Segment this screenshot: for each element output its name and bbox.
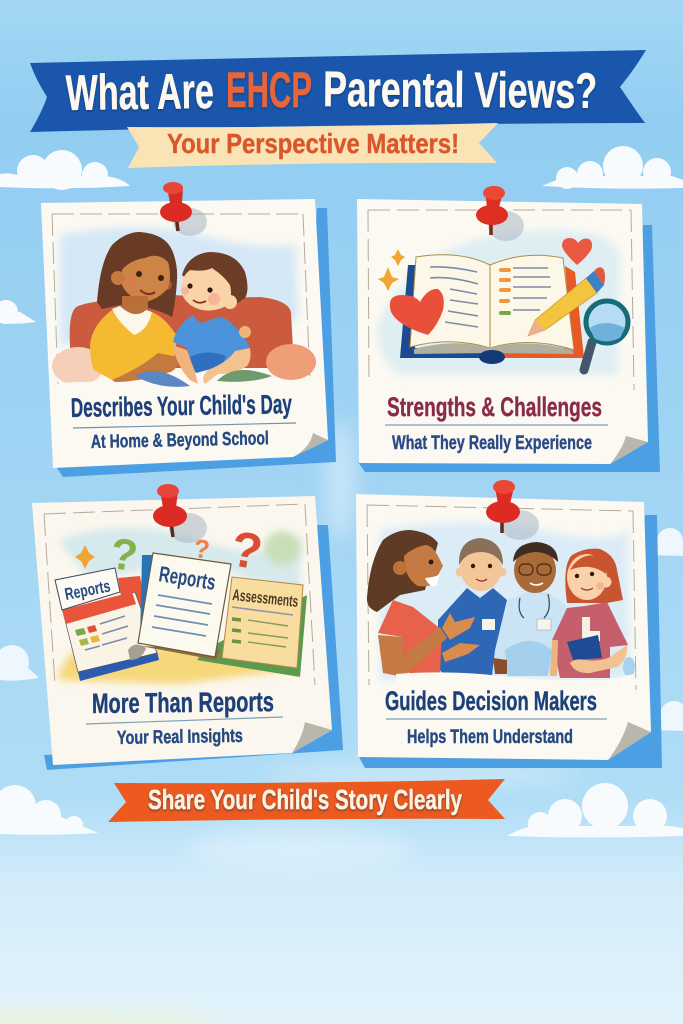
subtitle text: Your Perspective Matters! xyxy=(167,128,459,159)
page curl xyxy=(292,722,332,753)
heart small xyxy=(562,238,592,265)
paper shadow xyxy=(358,225,660,472)
card heading: Strengths & Challenges xyxy=(387,392,602,422)
professional in blue shirt xyxy=(438,538,507,676)
panel: more than reports xyxy=(32,496,343,770)
panel: strengths and challenges xyxy=(357,199,660,472)
professional with red hair xyxy=(550,549,635,678)
card heading: More Than Reports xyxy=(92,686,274,719)
card subheading: What They Really Experience xyxy=(392,433,592,454)
title banner xyxy=(30,50,646,132)
page curl xyxy=(608,722,651,760)
right document label: Assessments xyxy=(232,587,299,611)
parent xyxy=(90,232,190,387)
card heading: Describes Your Child's Day xyxy=(71,389,292,423)
illustration: parent and child on sofa xyxy=(52,228,316,394)
sparkle xyxy=(75,545,95,569)
cloud: right lower xyxy=(655,701,683,731)
paper shadow xyxy=(44,525,343,770)
cloud: bottom left xyxy=(0,785,98,835)
card subheading: Your Real Insights xyxy=(117,726,243,749)
professional in pale shirt xyxy=(492,542,575,676)
title text: EHCP xyxy=(226,62,312,118)
cloud: left small xyxy=(0,300,36,324)
cloud: top right xyxy=(542,146,683,189)
card subheading: At Home & Beyond School xyxy=(91,428,269,453)
bottom horizon glow xyxy=(0,1010,220,1024)
illustration: parent talking to professionals xyxy=(367,522,635,690)
subtitle ribbon xyxy=(127,123,498,168)
pin: card 2 xyxy=(476,186,524,241)
cloud: top left xyxy=(0,150,130,190)
paper shadow xyxy=(55,208,336,477)
paper shadow xyxy=(358,515,662,768)
title text: What Are xyxy=(65,63,214,121)
footer ribbon xyxy=(108,779,505,822)
paper sheet xyxy=(356,494,651,760)
paper sheet xyxy=(41,199,328,468)
pin: card 1 xyxy=(160,182,207,236)
paper sheet xyxy=(32,496,332,765)
middle document xyxy=(138,553,231,660)
magnifier xyxy=(584,301,628,370)
page curl xyxy=(293,433,328,457)
soft haze near footer xyxy=(190,420,580,872)
sofa xyxy=(70,295,293,368)
panel: guides decision makers xyxy=(356,494,662,768)
child xyxy=(172,252,272,384)
left document xyxy=(55,568,159,681)
sparkles xyxy=(378,267,399,291)
paper sheet xyxy=(357,199,648,464)
question marks: ? xyxy=(107,529,141,581)
right document xyxy=(197,577,307,677)
left document label: Reports xyxy=(63,576,112,604)
book xyxy=(400,255,584,364)
illustration: reports and assessments xyxy=(55,520,307,684)
pin: card 3 xyxy=(153,484,207,543)
parent xyxy=(367,530,480,677)
card subheading: Helps Them Understand xyxy=(407,727,573,748)
middle document label: Reports xyxy=(157,561,217,595)
pencil xyxy=(528,278,597,336)
title text xyxy=(65,61,597,121)
cloud: right upper xyxy=(648,528,683,556)
heart large xyxy=(390,289,444,335)
illustration: reports and assessments: ? xyxy=(227,520,267,581)
cloud: left mid xyxy=(0,645,39,681)
cloud: bottom right xyxy=(507,783,683,838)
illustration: open book, heart, pencil, magnifier xyxy=(378,231,628,375)
panel: describes your child's day xyxy=(41,199,336,477)
pin: card 4 xyxy=(486,480,539,540)
page curl xyxy=(610,436,648,464)
footer text: Share Your Child's Story Clearly xyxy=(148,784,462,815)
illustration: reports and assessments: ? xyxy=(192,533,211,565)
